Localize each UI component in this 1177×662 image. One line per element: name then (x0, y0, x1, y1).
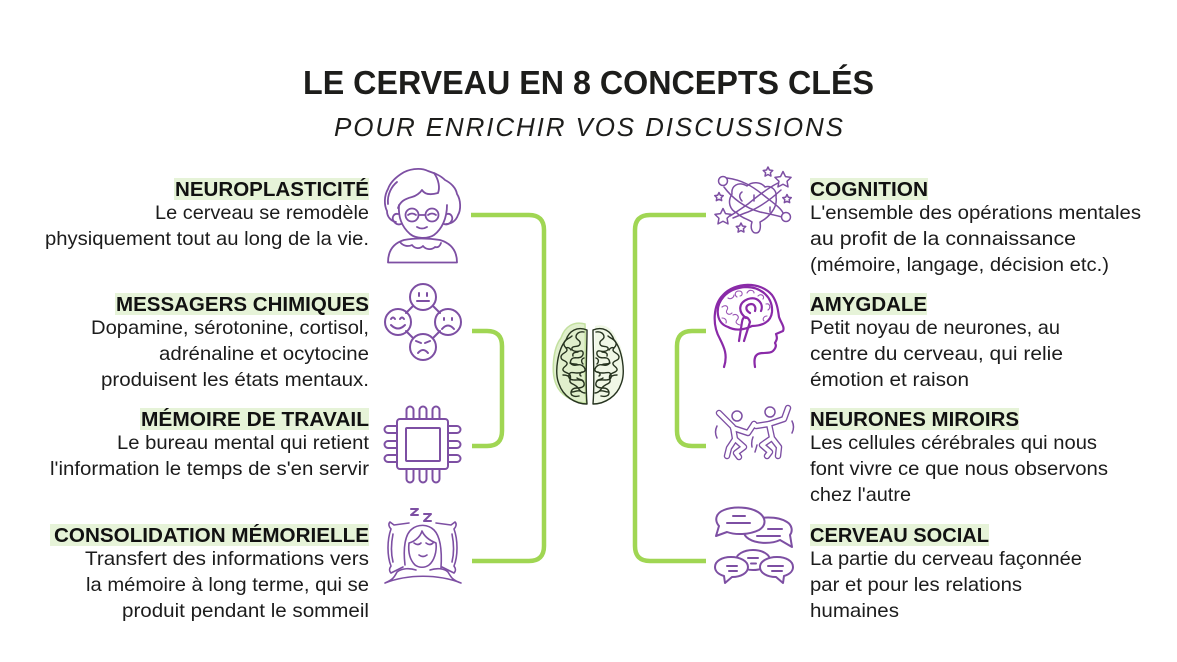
icon: elderly woman (385, 169, 460, 262)
description: font vivre ce que nous observons (810, 458, 1108, 480)
panel: cerveau social (810, 524, 1082, 622)
panel: mémoire de travail (50, 408, 370, 480)
description: au profit de la connaissance (810, 228, 1076, 250)
heading highlight (140, 408, 369, 430)
description: Le cerveau se remodèle (155, 202, 369, 224)
description (810, 548, 1082, 622)
description: Les cellules cérébrales qui nous (810, 432, 1097, 454)
icon: head with brain (715, 285, 784, 367)
panel: neurones miroirs (810, 408, 1108, 506)
heading: NEUROPLASTICITÉ (175, 178, 369, 201)
panel: consolidation mémorielle (50, 524, 369, 622)
description (85, 548, 369, 622)
connector: inner left bracket (472, 331, 502, 446)
icon: dancing figures (716, 407, 794, 457)
description (50, 432, 370, 480)
description: Dopamine, sérotonine, cortisol, (91, 317, 369, 339)
heading: COGNITION (810, 178, 928, 201)
subtitle: POUR ENRICHIR VOS DISCUSSIONS (334, 112, 844, 142)
description: produisent les états mentaux. (101, 369, 369, 391)
description: centre du cerveau, qui relie (810, 343, 1063, 365)
icon: central brain (553, 323, 624, 404)
description: l'information le temps de s'en servir (50, 458, 370, 480)
description: (mémoire, langage, décision etc.) (810, 254, 1109, 276)
description: la mémoire à long terme, qui se (86, 574, 369, 596)
description: humaines (810, 600, 899, 622)
heading: MESSAGERS CHIMIQUES (116, 293, 369, 316)
panel: messagers chimiques (91, 293, 369, 391)
description (45, 202, 369, 250)
heading: MÉMOIRE DE TRAVAIL (141, 408, 369, 431)
icon: cognition orbiting brain (715, 167, 791, 233)
heading highlight (174, 178, 369, 200)
description: émotion et raison (810, 369, 969, 391)
icon: sleeping person (385, 509, 461, 583)
connector: outer right bracket (635, 215, 706, 561)
description: L'ensemble des opérations mentales (810, 202, 1141, 224)
heading: AMYGDALE (810, 293, 927, 316)
description: par et pour les relations (810, 574, 1022, 596)
panel: cognition (810, 178, 1141, 276)
panel: neuroplasticité (45, 178, 369, 250)
description: adrénaline et ocytocine (159, 343, 369, 365)
heading highlight (810, 293, 927, 315)
heading highlight (810, 524, 989, 546)
icon: emotion faces (385, 284, 461, 360)
description (810, 317, 1063, 391)
title: LE CERVEAU EN 8 CONCEPTS CLÉS (303, 64, 874, 101)
description: produit pendant le sommeil (122, 600, 369, 622)
heading highlight (810, 178, 928, 200)
description (810, 432, 1108, 506)
description (91, 317, 369, 391)
description: physiquement tout au long de la vie. (45, 228, 369, 250)
panel: amygdale (810, 293, 1063, 391)
connector: outer left bracket (471, 215, 544, 561)
heading: NEURONES MIROIRS (810, 408, 1019, 431)
description: Petit noyau de neurones, au (810, 317, 1060, 339)
heading highlight (115, 293, 369, 315)
heading highlight (50, 524, 369, 546)
description: chez l'autre (810, 484, 911, 506)
heading: CERVEAU SOCIAL (810, 524, 989, 547)
icon: chip (384, 406, 461, 482)
description: Le bureau mental qui retient (117, 432, 370, 454)
heading highlight (810, 408, 1019, 430)
description: La partie du cerveau façonnée (810, 548, 1082, 570)
icon: speech bubbles (715, 508, 793, 583)
connector: inner right bracket (677, 331, 706, 446)
description: Transfert des informations vers (85, 548, 369, 570)
heading: CONSOLIDATION MÉMORIELLE (54, 524, 369, 547)
description (810, 202, 1141, 276)
